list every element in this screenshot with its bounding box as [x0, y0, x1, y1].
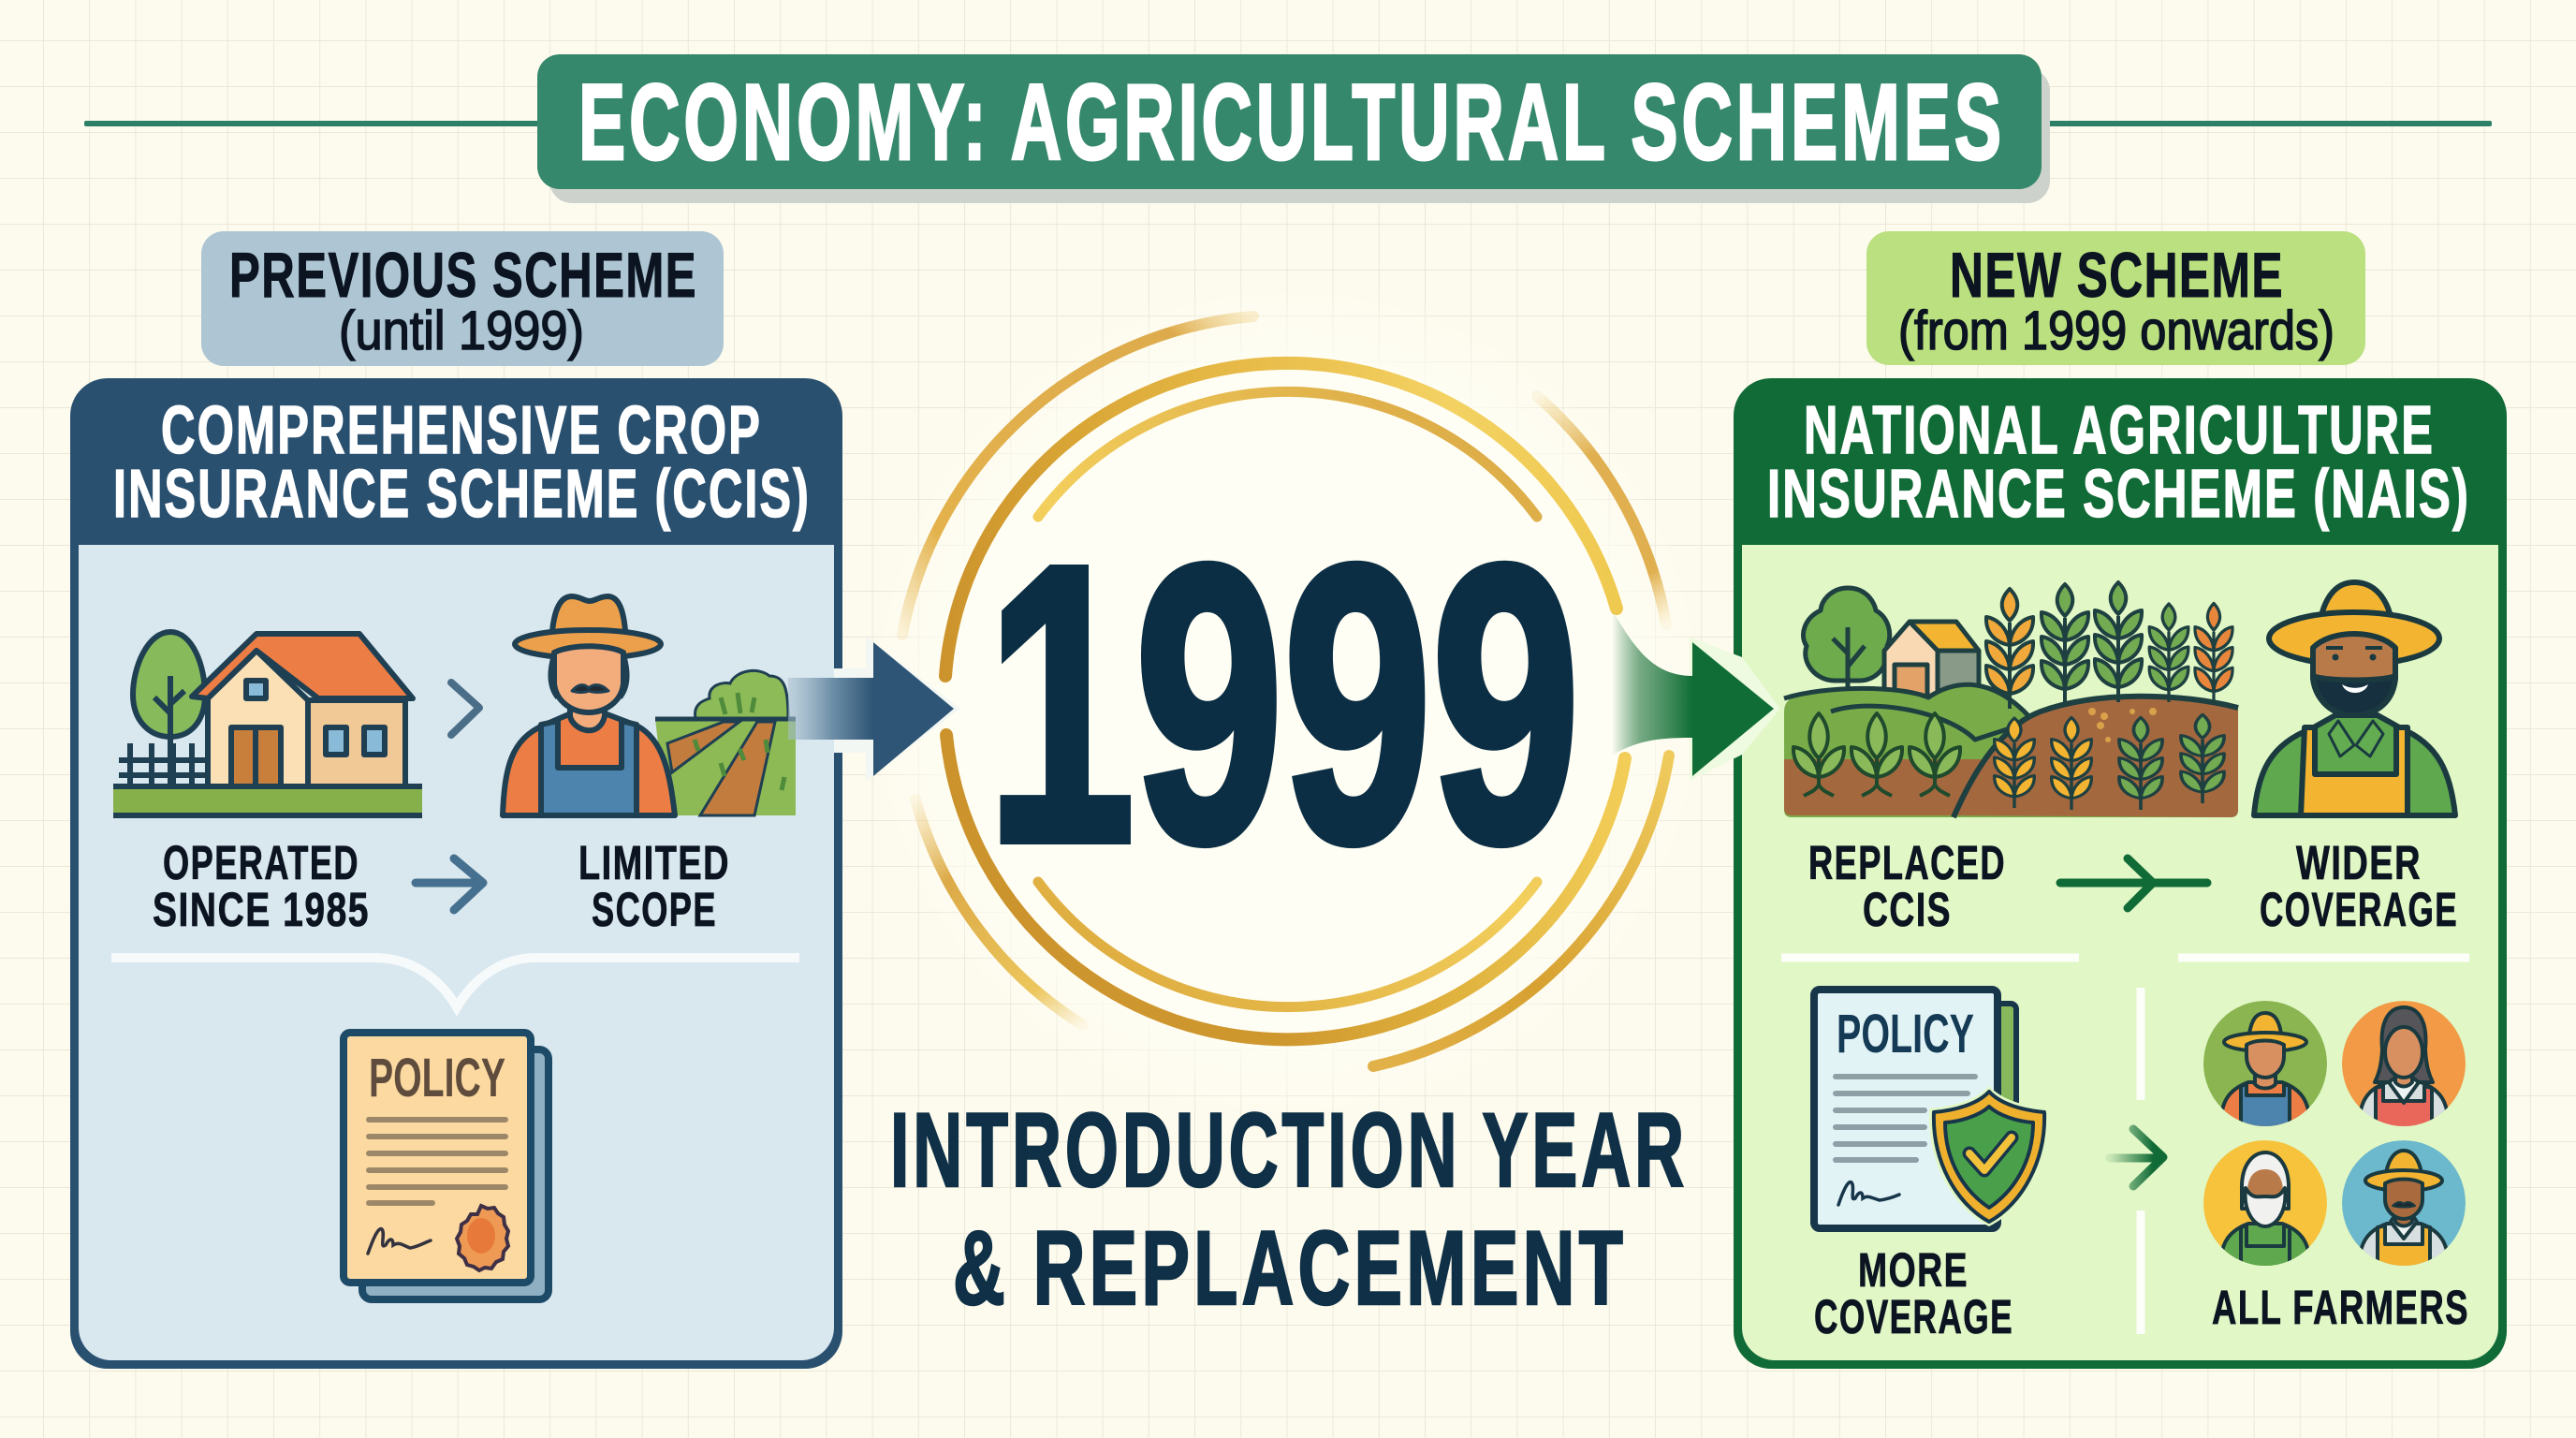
arrow: policy to farmers	[2110, 1129, 2163, 1186]
label: more coverage	[1814, 1243, 2013, 1343]
label: replaced CCIS: REPLACED	[1808, 836, 2006, 889]
icon: field behind farmer	[655, 670, 796, 815]
label: wider coverage: WIDER	[2296, 836, 2422, 889]
label: replaced CCIS: CCIS	[1863, 883, 1952, 936]
icon: smiling farmer	[2254, 582, 2455, 815]
label: replaced CCIS	[1808, 836, 2006, 936]
label: limited scope	[578, 836, 730, 936]
dividers	[1781, 958, 2469, 1334]
label: operated since 1985	[153, 836, 370, 936]
icon: farmer	[503, 596, 675, 815]
arrow: operated to limited	[416, 858, 483, 910]
lower seedlings	[1793, 713, 1960, 796]
label: limited scope: LIMITED	[578, 836, 730, 889]
brace divider	[111, 958, 799, 1007]
barn	[1884, 622, 1979, 697]
icon: policy with shield	[1814, 990, 2049, 1228]
golden rings	[902, 316, 1669, 1066]
CCIS panel frame and heading: INSURANCE SCHEME (CCIS)	[113, 457, 811, 532]
CCIS panel frame and heading	[70, 378, 842, 1369]
label: more coverage: COVERAGE	[1814, 1290, 2013, 1343]
label: all farmers: ALL FARMERS	[2212, 1281, 2469, 1334]
icon: farmer avatar green	[2203, 1001, 2327, 1129]
label: wider coverage: COVERAGE	[2260, 883, 2458, 936]
lower wheat	[1995, 714, 2224, 810]
caption: introduction year and replacement: INTRODUCTION YEAR	[890, 1092, 1688, 1209]
shield	[1929, 1086, 2049, 1226]
caption: introduction year and replacement: & REPLACEMENT	[953, 1210, 1627, 1327]
title banner	[84, 54, 2492, 203]
arrow: replaced to wider	[2060, 858, 2207, 908]
label: wider coverage	[2260, 836, 2458, 936]
label: more coverage: MORE	[1858, 1243, 1969, 1297]
caption: introduction year and replacement	[890, 1092, 1688, 1327]
label: operated since 1985: OPERATED	[163, 836, 359, 889]
year 1999: 1999	[987, 485, 1580, 924]
icon: farmer avatar blue	[2342, 1140, 2466, 1269]
CCIS panel frame and heading: COMPREHENSIVE CROP	[161, 393, 762, 468]
tag: new scheme	[1866, 231, 2365, 365]
tag: previous scheme: (until 1999)	[339, 301, 584, 361]
icon: policy document: POLICY	[369, 1048, 505, 1108]
tag: new scheme: (from 1999 onwards)	[1898, 301, 2334, 361]
tag: previous scheme: PREVIOUS SCHEME	[229, 240, 697, 311]
tree	[1803, 588, 1890, 708]
NAIS panel frame and heading	[1734, 378, 2507, 1369]
green hills	[1784, 684, 2238, 817]
icon: farmhouse	[113, 632, 422, 815]
icon: chevron between house and farmer	[451, 682, 479, 735]
icon: farmer avatar orange	[2342, 1001, 2466, 1129]
icon: farmer avatar yellow	[2203, 1140, 2327, 1269]
icon: farm landscape	[1784, 582, 2238, 817]
panel: CCIS previous scheme	[70, 378, 842, 1369]
icon: policy document	[344, 1033, 549, 1299]
arrow: 1999 to NAIS	[1612, 609, 1780, 781]
icon: policy with shield: POLICY	[1837, 1004, 1974, 1064]
arrow: CCIS to 1999	[788, 637, 960, 781]
upper crops	[1986, 582, 2232, 709]
panel: NAIS new scheme	[1734, 378, 2507, 1369]
tag: previous scheme	[201, 231, 724, 366]
tag: new scheme: NEW SCHEME	[1950, 240, 2284, 311]
label: operated since 1985: SINCE 1985	[153, 883, 370, 936]
centre glow	[867, 281, 1709, 1123]
label: limited scope: SCOPE	[592, 883, 717, 936]
